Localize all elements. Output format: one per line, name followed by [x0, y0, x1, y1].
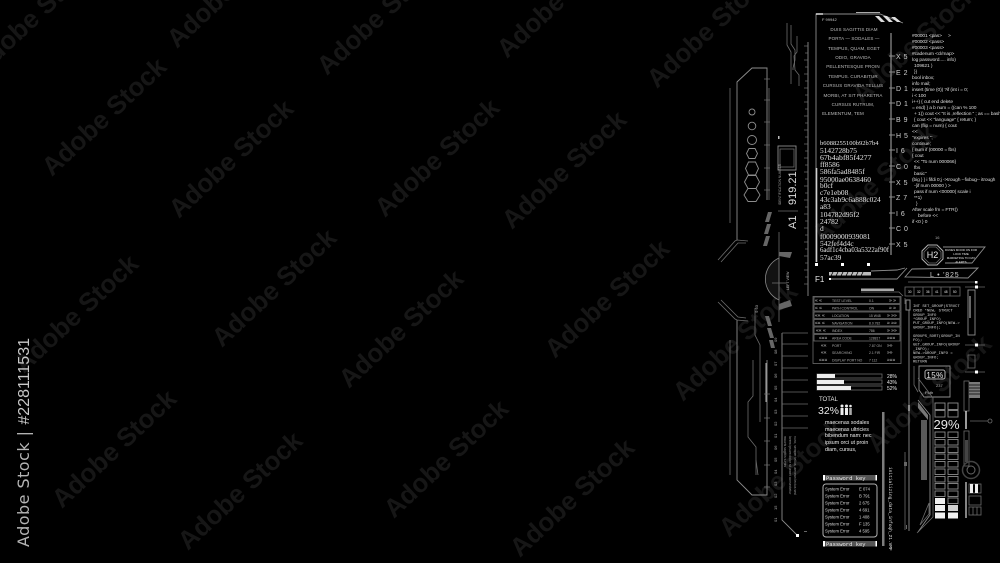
scale numbers: 05	[773, 385, 778, 390]
watermark pattern: Adobe Stock	[806, 118, 943, 249]
table: status rows: » »»	[887, 328, 897, 334]
table: status rows: » »	[889, 306, 896, 312]
text block: paragraph	[825, 420, 872, 453]
vertical rails	[904, 300, 910, 531]
icon: people	[840, 404, 852, 415]
tick labels: D 1	[896, 86, 908, 93]
tick labels: H 5	[896, 133, 908, 140]
table: status rows: » »»	[887, 320, 897, 326]
text block: paragraph: maecenas sodales	[825, 420, 870, 426]
panel: password key errors: E 074	[859, 486, 871, 492]
icon: hexagon chain	[744, 109, 760, 202]
chart: 29 percent cell grid	[933, 403, 960, 518]
watermark pattern: Adobe Stock	[539, 233, 676, 364]
cell strip: 41	[935, 290, 939, 294]
text block: hex values: ff8586	[820, 160, 840, 169]
text block: name list: ODIO, GRAVIDA	[835, 55, 871, 60]
text block: code listing: }	[916, 201, 918, 207]
readout: A1 919.21: IDENTIFICATION NUMBER	[778, 163, 782, 205]
table: status rows: « «	[815, 298, 822, 304]
panel: L 825 readout: L • '825	[930, 272, 959, 279]
icon: H2 octagon with note	[922, 235, 985, 265]
table: status rows: ON	[869, 306, 875, 310]
stat: total 32 percent: TOTAL	[819, 397, 838, 403]
bar chart: percentages: 28%	[887, 374, 898, 380]
cell strip: 36	[926, 290, 930, 294]
text block: name list: MORBI, AT SIT PHARETRA	[824, 93, 882, 98]
watermark pattern: Adobe Stock	[504, 432, 641, 563]
panel: password key errors: System Error	[825, 486, 850, 492]
tick labels: E 2	[896, 70, 908, 77]
text block: code listing: basic"	[914, 171, 927, 177]
text block: code listing: log password..... info)	[912, 57, 956, 63]
slanted hatched column	[917, 378, 933, 533]
text block: name list: TEMPUS, QUAM, EGET	[828, 46, 880, 51]
watermark pattern: Adobe Stock	[378, 393, 515, 524]
text block: struct code: CRED *NEW, STRUCT	[913, 308, 953, 314]
scale numbers: 06	[773, 445, 778, 450]
cell strip: 50	[953, 290, 957, 294]
table: status rows: 7 112	[869, 358, 877, 362]
watermark pattern: Adobe Stock	[8, 248, 145, 379]
rotated small notes: nunc, semper tellus, aenean lectus sed	[793, 436, 797, 495]
table: status rows: NAVIGATION	[832, 322, 853, 326]
watermark pattern: Adobe Stock	[333, 263, 470, 394]
tick labels: X 5	[896, 180, 908, 187]
panel: 15 percent: 15%	[926, 371, 944, 380]
readout: A1 919.21	[778, 163, 799, 229]
text block: code listing: { cout	[912, 153, 924, 159]
watermark pattern: Adobe Stock	[163, 93, 300, 224]
text block: paragraph: maecenas ultricies	[825, 427, 869, 433]
chart: 29 percent cell grid: 29%	[933, 417, 960, 432]
text block: paragraph: diam, cursus,	[825, 447, 856, 453]
watermark pattern: Adobe Stock	[861, 328, 998, 459]
text block: code listing: << "To num 000066}	[914, 159, 956, 165]
stock id vertical label: Adobe Stock |	[14, 431, 33, 547]
icon: square target	[778, 136, 796, 170]
table: status rows: TEST LEVEL	[832, 299, 852, 303]
text block: struct code: NEW->GROUP_INFO =	[913, 351, 953, 356]
cell strip	[905, 287, 960, 304]
table: status rows: 786	[869, 329, 875, 333]
scale numbers: 04	[773, 469, 778, 474]
text block: name list: PORTA — SODALES —	[829, 36, 880, 41]
table: status rows: 0.1	[869, 299, 874, 303]
scale numbers: 01	[773, 433, 778, 438]
scale numbers: 02	[773, 421, 778, 426]
watermark pattern: Adobe Stock	[172, 425, 309, 556]
panel: password key errors: System Error	[825, 508, 850, 512]
text block: name list: PELLENTESQUE PROIN	[826, 64, 880, 69]
text block: hex values: 67b4abf85f4277	[820, 153, 872, 162]
text block: code listing: before <<	[918, 213, 938, 219]
tick labels	[896, 54, 908, 249]
text block: hex values: 95000ae0638460	[820, 175, 871, 184]
circuit traces top	[787, 23, 799, 86]
tick labels: D 1	[896, 101, 908, 108]
text block: hex values: f0009000939081	[820, 232, 871, 241]
text block: name list: CURSUS RUTRUM,	[832, 102, 874, 107]
text block: hex values: a83	[820, 202, 831, 211]
panel: 15 percent: Path	[925, 390, 933, 395]
text block: hex values: 6adf1c4cba03a5322af90f	[820, 247, 890, 254]
panel: L 825 readout	[905, 268, 978, 284]
icon: slanted chevrons	[763, 212, 772, 246]
table: status rows: «««	[819, 336, 828, 342]
table: status rows: »»	[887, 343, 893, 349]
text block: struct code: GET_GROUP_INFO(GROUP	[913, 342, 960, 348]
watermark pattern: Adobe Stock	[713, 412, 850, 543]
scale numbers: 03	[773, 481, 778, 486]
panel: password key errors: 2 675	[859, 500, 870, 506]
watermark pattern: Adobe Stock	[36, 51, 173, 182]
text block: name list: CURSUS GRAVIDA TELLUS	[823, 83, 883, 88]
text block: struct code: RETURN	[913, 360, 928, 364]
scale numbers: 09	[773, 337, 778, 342]
text block: struct code: GROUPS_SORT(GROUP_IN	[913, 334, 960, 339]
table: status rows: PORT	[832, 344, 841, 348]
scale numbers: 15	[773, 505, 778, 510]
text block: hex values: 5142728b75	[820, 146, 857, 155]
table: status rows: »»»	[887, 358, 896, 364]
icon: H2 octagon with note: ALERTS	[955, 260, 967, 264]
icon: corner stripes	[875, 16, 901, 22]
readout: A1 919.21: 919.21	[787, 171, 799, 205]
tick labels: C 0	[896, 226, 908, 233]
panel: password key errors: System Error	[825, 528, 850, 534]
text block: code listing: { cout << "language" { return; }	[914, 117, 976, 123]
scale lines with dot	[782, 333, 808, 537]
icon: H2 octagon with note: H2	[927, 250, 938, 260]
table: status rows: » »	[889, 298, 896, 304]
text block: struct code: GROUP_INFO	[913, 314, 937, 318]
text block: struct code	[912, 304, 960, 364]
panel: 15 percent: 237	[936, 383, 943, 388]
table: status rows: »»»	[887, 336, 896, 342]
stat: total 32 percent	[818, 397, 852, 417]
table: status rows: «« «	[815, 313, 825, 319]
text block: paragraph: bibendum nam: nec	[825, 433, 872, 439]
text block: code listing: }}	[914, 69, 918, 75]
readout: A1 919.21: A1	[787, 216, 799, 229]
stock id vertical label	[14, 338, 33, 547]
text block: code listing: -{if num 00000 ) >	[914, 183, 951, 189]
icon: lower slanted chevrons	[765, 316, 775, 348]
table: status rows: INDEX	[832, 329, 843, 333]
text block: name list: DUIS SAGITTIS DIAM	[830, 27, 878, 32]
text block: code listing: After scale fm = FTR()	[912, 207, 958, 213]
tick labels: C 0	[896, 164, 908, 171]
text block: code listing: { num if (00000 = fbs)	[912, 147, 956, 153]
text block: struct code: PUT_GROUP_INFO(NEW->	[913, 321, 960, 326]
panel: password key errors: B 791	[859, 494, 871, 498]
text block: code listing: #00003 <pass>	[912, 45, 944, 51]
table: status rows: « «	[815, 306, 822, 312]
markers	[815, 263, 870, 266]
text block: name list	[822, 27, 883, 116]
scale numbers: 05	[773, 457, 778, 462]
text block: code listing	[912, 33, 1000, 225]
table: status rows: DISPLAY PORT NO	[832, 358, 863, 362]
text block: code listing: 109621 )	[914, 63, 933, 69]
icon: H2 octagon with note: 16	[935, 235, 940, 240]
text block: code listing: if <0 } 0	[912, 219, 928, 225]
panel: password key errors: 4 691	[859, 508, 870, 512]
text block: code listing: i++) { cut end delete	[912, 99, 953, 105]
table: status rows: 7.87 ON	[869, 344, 882, 348]
gauge: left view half circle	[765, 232, 792, 322]
text block: hex values: 586fa5ad8485f	[820, 167, 865, 176]
scale numbers: 04	[773, 397, 778, 402]
panel: password key errors: F 135	[859, 522, 870, 526]
text block: hex values: 57ac39	[820, 253, 842, 262]
text block: code listing: **1)	[914, 195, 922, 201]
text block: hex values: c7e1eb08	[820, 188, 849, 197]
text block: name list: TEMPUS. CURABITUR	[828, 74, 878, 79]
text block: code listing: "expires ";	[912, 135, 933, 141]
panel: left lower frame: 9 63	[754, 304, 759, 313]
watermark pattern: Adobe Stock	[667, 276, 804, 407]
text block: code listing: can (flip = num) { cout	[912, 123, 957, 129]
text block: code listing: <<	[912, 129, 918, 135]
table: status rows: 8.0.782	[869, 322, 880, 326]
scale numbers: 02	[773, 493, 778, 498]
icon: H2 octagon with note: LOCK TIME	[953, 252, 969, 256]
table: status rows: «««	[819, 358, 828, 364]
watermark pattern: Adobe Stock	[46, 383, 183, 514]
text block: hex values: 542fef4d4c	[820, 239, 854, 248]
table: status rows: »»	[887, 350, 893, 356]
text block: code listing: (big } } i fifdi 0;j ->trough --fixbug-- itrough	[912, 177, 996, 183]
text block: hex values: 24782	[820, 217, 839, 226]
text block: hex values: 43c3ab9c6a888c024	[820, 195, 881, 204]
text block: struct code: _INFO);	[912, 347, 929, 352]
small tick marks	[804, 525, 907, 532]
panel: left lower frame	[718, 300, 770, 495]
table: status rows: 128817	[869, 336, 880, 340]
panel: password key errors: System Error	[825, 494, 850, 498]
text block: hex values: d	[820, 224, 824, 233]
text block: code listing: #cadenum <cl/map>	[912, 51, 955, 57]
table: status rows: LOCATION	[832, 314, 850, 318]
right side widgets	[962, 286, 992, 518]
scale numbers: 08	[773, 349, 778, 354]
text block: code listing: insert (time (0)) ?if (int i = 0;	[912, 87, 968, 93]
vertical bar and init label: initializing_data_infoqh_21.VMF	[887, 467, 893, 551]
rotated small notes	[783, 436, 797, 495]
scale numbers: 07	[773, 361, 778, 366]
tick labels: X 5	[896, 242, 908, 249]
rotated small notes: lorem ipsum dolor sit amet consectetur	[788, 436, 792, 495]
table: status rows: ««	[821, 350, 827, 356]
table: status rows	[813, 296, 901, 364]
panel: password key errors: 1 408	[859, 514, 870, 520]
watermark pattern: Adobe Stock	[369, 92, 506, 223]
text block: hex values: 104782d95f2	[820, 210, 860, 219]
cell strip: 48	[944, 290, 948, 294]
text block: hex values: b6088255100b92b7b4	[820, 140, 879, 147]
panel: left upper frame with hexagons	[718, 68, 770, 262]
watermark pattern: Adobe Stock	[206, 222, 343, 353]
text block: struct code: INT SET_GROUP(STRUCT	[913, 304, 960, 309]
table: status rows: SEARCHING	[832, 351, 853, 355]
scale numbers: 03	[773, 409, 778, 414]
text block: paragraph: ipsum orci ut proin	[825, 440, 868, 446]
panel: password key errors: System Error	[825, 514, 850, 520]
table: status rows: «« «	[815, 320, 825, 326]
panel: password key errors	[823, 475, 877, 548]
panel: password key errors: 4 595	[859, 528, 870, 534]
panel: main data frame: F 99942	[822, 17, 837, 22]
panel: password key errors: Password key	[826, 541, 866, 548]
table: status rows: » »»	[887, 313, 897, 319]
tick labels: I 6	[896, 211, 905, 218]
stock id vertical label: #228111531	[16, 338, 33, 425]
icon: H2 octagon with note: DUNES MOOD ON FOR	[945, 248, 977, 252]
text block: code listing: info mail;	[912, 81, 930, 87]
tick labels: X 5	[896, 54, 908, 61]
text block: code listing: #00002 <pass>	[912, 39, 944, 45]
panel: password key errors: Password key	[826, 475, 866, 482]
scale numbers: 06	[773, 373, 778, 378]
table: status rows: PATH CONTROL	[832, 306, 858, 310]
label: F1 with striped bar	[815, 268, 907, 284]
icon: H2 octagon with note: MARKETING TO DAY	[947, 256, 975, 260]
bar chart: percentages: 52%	[887, 386, 898, 392]
text block: hex values: b0cf	[820, 181, 834, 190]
scale numbers	[773, 337, 778, 522]
text block: struct code: GROUP_INFO);	[913, 326, 941, 330]
text block: hex values	[820, 140, 890, 262]
scale numbers: 01	[773, 517, 778, 522]
text block: struct code: *GROUP_INFO)	[913, 317, 941, 322]
gauge: left view half circle: LEFT VIEW	[786, 271, 790, 290]
table: status rows: «« «	[816, 328, 826, 334]
vertical bar and init label	[882, 412, 893, 551]
table: status rows: 2.1 FIR	[869, 351, 881, 355]
cell strip: 30	[908, 290, 912, 294]
text block: code listing: = end) } a b num = ((can % 100	[912, 105, 977, 111]
tick labels: B 9	[896, 117, 908, 124]
text block: code listing: pass if num <00000( scale i	[914, 189, 970, 195]
panel: password key errors: System Error	[825, 500, 850, 506]
cell strip: 32	[917, 290, 921, 294]
stat: total 32 percent: 32%	[818, 405, 839, 417]
text block: struct code: FO);	[913, 338, 922, 343]
bar chart: percentages	[817, 374, 898, 392]
rotated small notes: mauris sagittis turpis	[783, 436, 787, 467]
watermark pattern: Adobe Stock	[496, 104, 633, 235]
text block: name list: ELEMENTUM, TEM	[822, 111, 864, 116]
icon: ring	[962, 462, 980, 478]
text block: code listing: bool inbox;	[912, 75, 934, 81]
panel: 15 percent	[914, 366, 950, 397]
bar chart: percentages: 43%	[887, 380, 898, 386]
tick labels: Z 7	[896, 195, 908, 202]
text block: code listing: i < 100	[912, 93, 926, 99]
text block: code listing: continue;	[912, 141, 931, 147]
tick labels: I 6	[896, 148, 905, 155]
ruler	[804, 42, 808, 296]
text block: code listing: #00001 <pas> >	[912, 33, 951, 39]
progress slider top	[861, 288, 903, 296]
panel: main data frame	[816, 12, 908, 262]
text block: struct code: GROUP_INFO;	[913, 356, 939, 360]
table: status rows: ««	[821, 343, 827, 349]
panel: password key errors: System Error	[825, 522, 850, 526]
label: F1 with striped bar: F1	[815, 275, 825, 284]
table: status rows: 15 W48	[869, 314, 881, 318]
text block: code listing: fbs	[914, 165, 921, 171]
table: status rows: AREA CODE	[832, 336, 853, 340]
